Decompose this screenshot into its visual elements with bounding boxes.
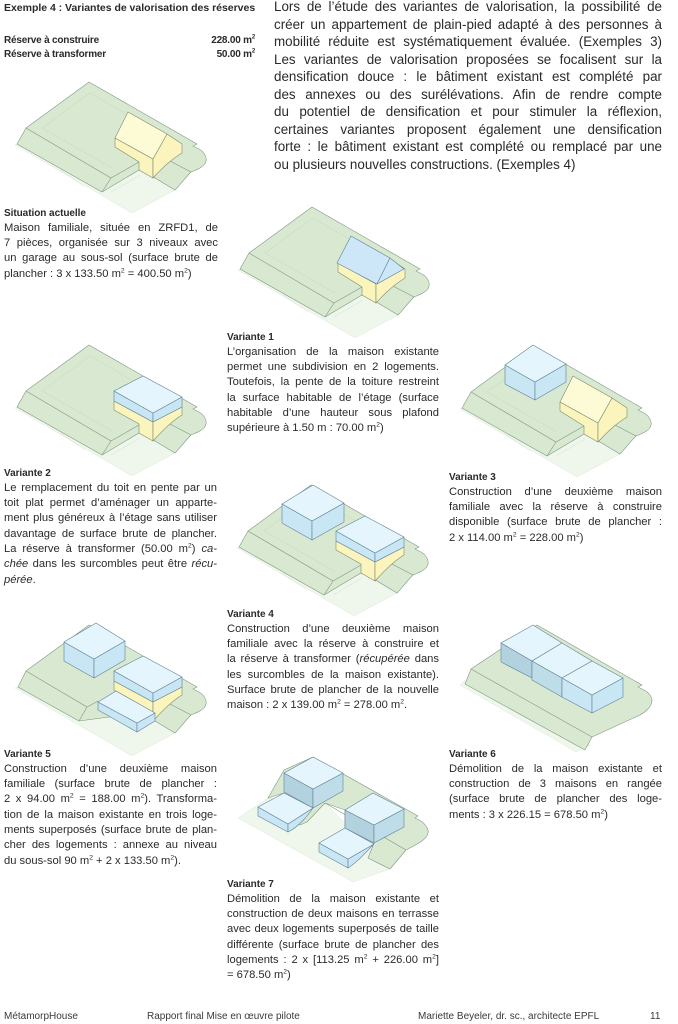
text: variante 2: pérée. [4,574,36,586]
row house 2 [532,643,592,697]
text: variante 2: ment plus généreux à l’étage sans utiliser [4,512,217,524]
diagram: variante 6 [460,625,652,752]
text: situation actuelle: 7 pièces, organisée sur 3 niveaux avec [4,237,218,249]
text: variante 5: 2 x 94.00 m2 = 188.00 m2). Transforma- [4,793,217,805]
text: variante 1: L’organisation de la maison existante [227,346,439,358]
site [238,757,428,882]
text: variante 7: différente (surface brute de plancher des [227,939,439,951]
raised existing house [114,656,182,721]
text: variante 7: avec deux logements superposés de taille [227,923,439,935]
text: situation actuelle: plancher : 3 x 133.50 m2 = 400.50 m2) [4,267,192,280]
text: variante 7: = 678.50 m2) [227,969,291,981]
text: variante 7: construction de deux maisons en terrasse [227,908,439,920]
intro paragraph: forte : le bâtiment existant est complété ou remplacé par une [274,139,662,154]
raised existing house [336,516,404,581]
flat roof house [114,376,182,441]
text: variante 3: familiale avec la réserve à construire [449,501,662,513]
reserve: a transformer: Réserve à transformer [4,49,106,60]
diagram: variante 4 [237,485,428,616]
text: variante 3: disponible (surface brute de plancher : [449,516,662,528]
footer: page number: 11 [650,1011,660,1022]
text: variante 5: tion de la maison existante en trois loge- [4,809,217,821]
site [15,625,206,756]
row house 3 [562,661,623,713]
footer: report: Rapport final Mise en œuvre pilote [147,1011,300,1022]
intro paragraph: densification douce : le bâtiment existant est complété par [274,69,662,84]
intro paragraph: mobilité réduite est systématiquement évaluée. (Exemples 3) [274,34,662,49]
back house [64,623,125,678]
text: variante 2: Variante 2 [4,468,51,478]
text: variante 7: Démolition de la maison existante et [227,893,439,905]
upper terrace house right [345,793,404,843]
text: variante 4: Variante 4 [227,608,274,620]
text: variante 6 [449,748,662,821]
intro paragraph: ou plusieurs nouvelles constructions. (Exemples 4) [274,157,575,172]
text: variante 4: Surface brute de plancher de la nouvelle [227,684,439,696]
text: variante 2: davantage de surface brute de plancher. [4,528,217,540]
text: situation actuelle [4,208,218,280]
text: variante 4: les surcombles de la maison existante). [227,669,439,681]
text: variante 4: maison : 2 x 139.00 m2 = 278.00 m2. [227,699,407,711]
existing house [560,376,627,442]
site [460,625,652,752]
text: situation actuelle: Situation actuelle [4,208,86,218]
text: variante 1 [227,332,439,434]
text: variante 5: du sous-sol 90 m2 + 2 x 133.50 m2). [4,854,181,867]
diagram: variante 2 [15,345,206,476]
text: variante 1: habitable d’une hauteur sous plafond [227,407,439,419]
text: variante 5 [4,748,217,867]
heading: exemple 4: Exemple 4 : Variantes de valorisation des réserves [4,2,255,14]
house with blue roof [337,236,405,303]
second house [505,345,566,400]
annex [98,691,155,732]
text: variante 7: logements : 2 x [113.25 m2 + 226.00 m2] [227,953,439,966]
intro paragraph: du potentiel de densification et pour stimuler la réflexion, [274,104,662,119]
text: variante 6: construction de 3 maisons en rangée [449,778,662,790]
text: variante 7: Variante 7 [227,878,274,890]
reserve: a construire: 228.00 m2 [211,35,255,46]
diagram: situation actuelle [15,82,206,213]
text: variante 5: Construction d’une deuxième maison [4,763,217,775]
text: variante 4: la réserve à transformer (récupérée dans [227,653,439,665]
intro paragraph: certaines variantes proposent également une densification [274,122,662,137]
text: variante 6: Variante 6 [449,748,496,760]
text: variante 3: Variante 3 [449,472,496,482]
diagram: variante 3 [460,345,651,477]
intro paragraph: des annexes ou des surélévations. Afin de rendre compte [274,87,662,102]
text: situation actuelle: Maison familiale, située en ZRFD1, de [4,222,218,234]
text: variante 4: Construction d’une deuxième maison [227,623,439,635]
diagram: variante 5 [15,623,206,756]
text: variante 3: 2 x 114.00 m2 = 228.00 m2) [449,531,584,544]
text: variante 1: permet une subdivision en 2 logements. [227,361,439,373]
upper terrace house left [284,757,343,808]
text: variante 4 [227,608,439,711]
footer: author: Mariette Beyeler, dr. sc., architecte EPFL [418,1011,599,1022]
text: variante 1: supérieure à 1.50 m : 70.00 m2) [227,422,384,434]
text: variante 1: Variante 1 [227,332,274,342]
text: variante 1: la surface habitable de l’étage (surface [227,392,439,404]
text: variante 3 [449,472,662,544]
row house 1 [501,625,562,678]
text: variante 7 [227,878,439,981]
text: variante 2: toit plat permet d’aménager un apparte- [4,497,217,509]
lower terrace house left [258,793,313,832]
text: situation actuelle: un garage au sous-sol (surface brute de [4,252,218,264]
intro paragraph [274,0,662,172]
text: variante 2: Le remplacement du toit en pente par un [4,482,217,494]
reserve: a transformer [4,48,255,60]
text: variante 6: (surface brute de plancher des loge- [449,793,662,805]
reserve: a construire [4,34,255,46]
lower terrace house right [319,828,374,868]
diagram: variante 7 [238,757,428,882]
text: variante 6: ments : 3 x 226.15 = 678.50 m2) [449,808,608,821]
text: variante 1: Toutefois, la pente de la toiture restreint [227,376,439,388]
text: variante 5: cher des logements : annexe au niveau [4,839,217,851]
intro paragraph: Les variantes de valorisation proposées se focalisent sur la [274,52,662,67]
text: variante 4: familiale avec la réserve à construire et [227,638,439,650]
intro paragraph: créer un appartement de plain-pied adapté à des personnes à [274,17,662,32]
footer: publisher: MétamorpHouse [4,1011,78,1022]
reserve: a transformer: 50.00 m2 [217,49,255,60]
reserve: a construire: Réserve à construire [4,35,99,46]
second house [282,485,344,540]
text: variante 6: Démolition de la maison existante et [449,763,662,775]
text: variante 5: familiale (surface brute de plancher : [4,778,217,790]
text: variante 2 [4,468,217,586]
text: variante 5: Variante 5 [4,748,51,760]
diagram: variante 1 [238,207,429,338]
house with yellow roof [115,112,182,178]
text: variante 3: Construction d’une deuxième maison [449,486,662,498]
text: variante 2: La réserve à transformer (50.00 m2) ca- [4,542,217,555]
text: variante 5: ments superposés (surface brute de plan- [4,824,217,836]
text: variante 2: chée dans les surcombles peut être récu- [4,558,217,570]
